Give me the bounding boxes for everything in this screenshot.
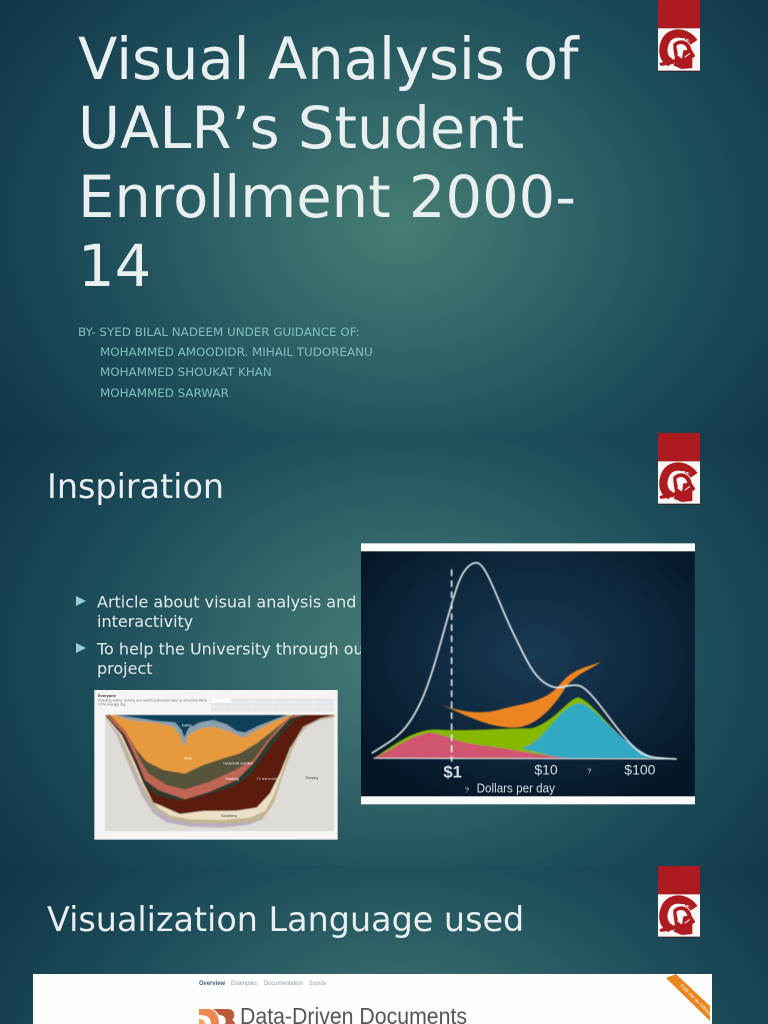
- image: income distribution chart: [361, 543, 695, 804]
- chart labels: Socializing: [221, 814, 237, 818]
- chart labels: Household activities: [223, 761, 253, 765]
- chart filter table: [211, 698, 334, 712]
- chart labels: Work: [184, 756, 192, 760]
- nav links: Overview: [199, 980, 226, 987]
- title: [78, 26, 580, 300]
- title: Enrollment 2000-: [78, 164, 576, 231]
- heading: Visualization Language used: Visualization Language used: [47, 900, 524, 939]
- chart labels: [182, 723, 318, 818]
- chart labels: Traveling: [225, 777, 239, 781]
- axis labels: $10: [534, 762, 558, 778]
- slide 1 background: [0, 0, 768, 433]
- axis labels: $100: [624, 762, 656, 778]
- chart subtitle line 2: of the average day.: [98, 703, 126, 707]
- authors and guidance text: BY- SYED BILAL NADEEM UNDER GUIDANCE OF:: [78, 325, 360, 339]
- ribbon: fork me on GitHub: [666, 974, 713, 1021]
- icon: D3 logo: [199, 1009, 235, 1024]
- title: 14: [78, 233, 151, 300]
- title: Visual Analysis of: [78, 26, 580, 93]
- authors and guidance text: MOHAMMED AMOODIDR. MIHAIL TUDOREANU: [100, 345, 373, 359]
- bullet list: interactivity: [97, 612, 193, 631]
- axis labels: ?: [465, 785, 469, 794]
- nav links: Source: [309, 980, 326, 987]
- image: D3 website screenshot: [33, 974, 713, 1024]
- bullet list: project: [97, 659, 153, 678]
- title: UALR’s Student: [78, 95, 524, 162]
- bullet list: To help the University through our: [96, 640, 371, 658]
- icon: UALR logo, slide 1: [658, 0, 700, 72]
- authors and guidance text: [78, 325, 373, 400]
- chart labels: Sleeping: [305, 776, 318, 780]
- chart subtitle: Sleeping, eating, working and watching television take up about two-thirds: [98, 699, 207, 703]
- icon: bullet arrow 1: [76, 596, 86, 606]
- heading: Inspiration: Inspiration: [47, 467, 224, 506]
- slide 2 background: [0, 433, 768, 866]
- chart: stacked stream graph: [94, 690, 338, 840]
- icon: bullet arrow 2: [76, 643, 86, 653]
- icon: UALR logo, slide 2: [658, 433, 700, 505]
- authors and guidance text: MOHAMMED SARWAR: [100, 386, 229, 400]
- slide 3 background: [0, 866, 768, 1024]
- nav links: Examples: [231, 980, 258, 987]
- axis labels: ?: [587, 766, 591, 775]
- axis labels: [443, 762, 656, 796]
- axis labels: Dollars per day: [477, 781, 555, 796]
- nav links: Documentation: [264, 980, 303, 987]
- chart title: Everyone: Everyone: [98, 693, 117, 698]
- nav links: [199, 980, 326, 987]
- chart labels: Eating: [182, 723, 192, 727]
- chart labels: TV and movies: [257, 777, 279, 781]
- authors and guidance text: MOHAMMED SHOUKAT KHAN: [100, 365, 272, 379]
- icon: UALR logo, slide 3: [658, 866, 700, 938]
- bullet list: [76, 592, 371, 678]
- axis labels: $1: [443, 762, 462, 781]
- bullet list: Article about visual analysis and: [97, 592, 356, 612]
- ribbon: fork me on GitHub: Fork me on GitHub: [679, 983, 713, 1017]
